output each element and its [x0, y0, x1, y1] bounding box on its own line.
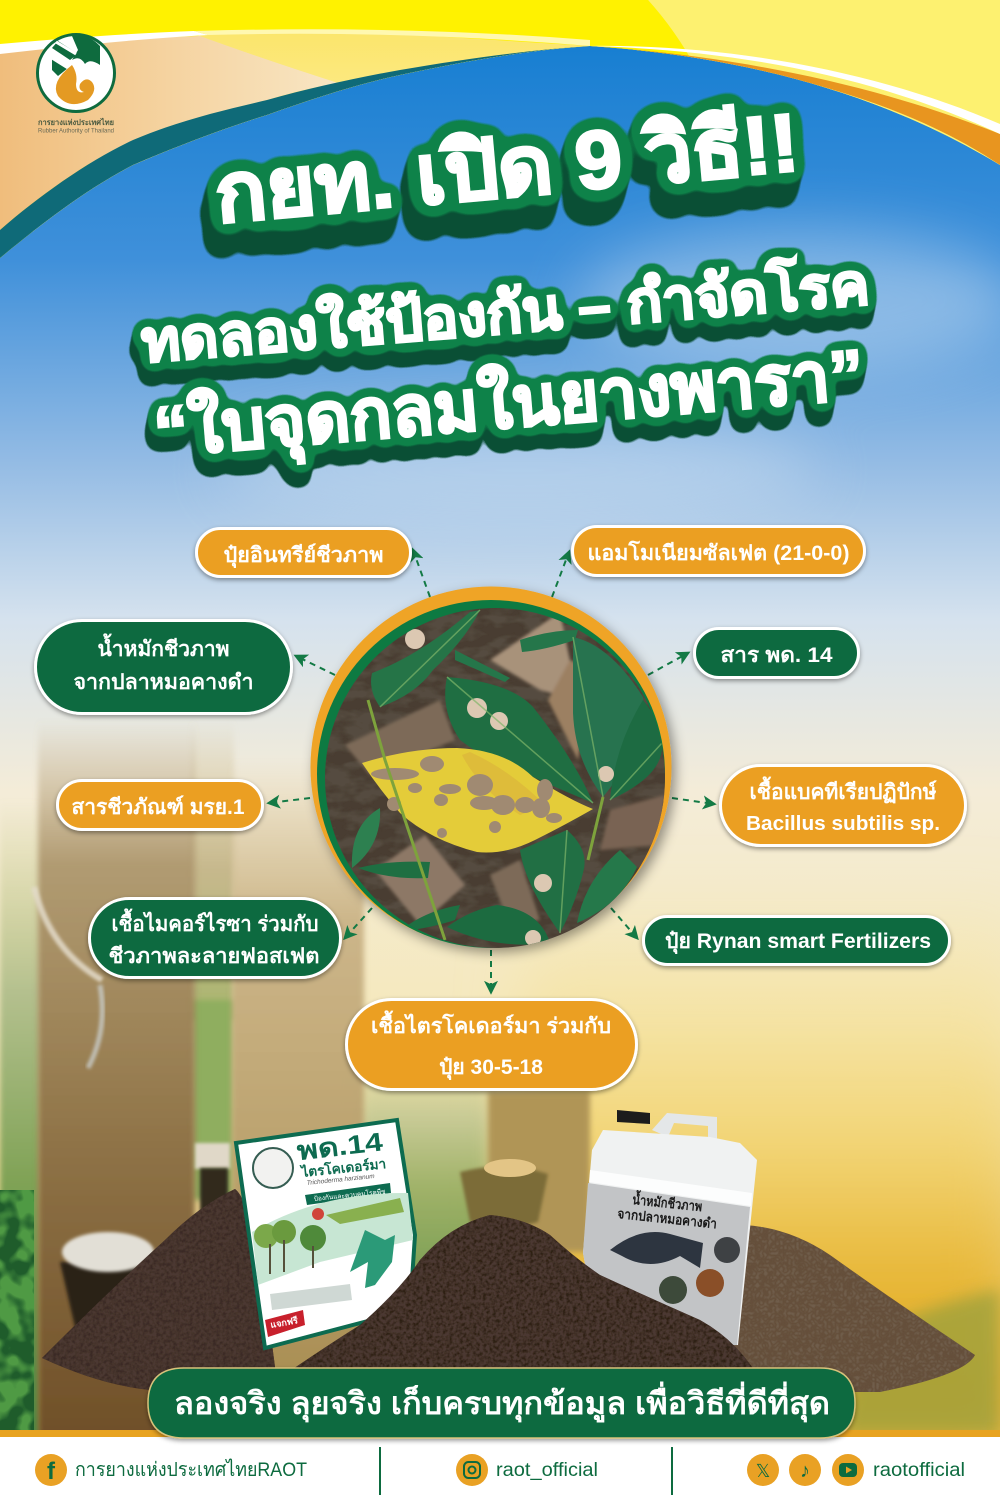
- product: LDD 14 trichoderma packet: ป้องกันและควบคุมโรคพืช: [313, 1187, 386, 1203]
- method: antagonistic bacteria: Bacillus subtilis sp.: [746, 813, 940, 835]
- method: biological product PSU 1: สารชีวภัณฑ์ มรย.1: [72, 795, 245, 819]
- logo: Rubber Authority of Thailand: การยางแห่งประเทศไทย: [38, 117, 114, 127]
- bottom slogan banner: ลองจริง ลุยจริง เก็บครบทุกข้อมูล เพื่อวิธีที่ดีที่สุด: [174, 1381, 830, 1423]
- footer: X, TikTok, YouTube: raotofficial: [873, 1459, 965, 1481]
- product: bio-extract jug: [583, 1110, 757, 1345]
- method: mycorrhiza with phosphate solubilizer: ชีวภาพละลายฟอสเฟต: [108, 944, 320, 968]
- footer: instagram: raot_official: [496, 1459, 598, 1481]
- product: LDD 14 trichoderma packet: ไตรโคเดอร์มา: [299, 1154, 387, 1180]
- method: Rynan smart fertilizers: [644, 916, 950, 964]
- method: biological product PSU 1: [58, 780, 262, 830]
- footer: [0, 1437, 1000, 1500]
- method: ammonium sulfate: [572, 526, 864, 576]
- method: ammonium sulfate: แอมโมเนียมซัลเฟต (21-0-0): [588, 540, 850, 565]
- product: LDD 14 trichoderma packet: Trichoderma harzianum: [306, 1173, 376, 1187]
- product: LDD 14 trichoderma packet: [236, 1120, 415, 1348]
- method: bio-extract from blackchin tilapia: น้ำหมักชีวภาพ: [97, 633, 230, 661]
- bottom slogan banner: [148, 1368, 855, 1438]
- method: bio-extract from blackchin tilapia: จากปลาหมอคางดำ: [74, 671, 254, 694]
- method: antagonistic bacteria: เชื้อแบคทีเรียปฏิปักษ์: [750, 776, 937, 804]
- fertilizer pile: pellets: [715, 1225, 975, 1392]
- product: LDD 14 trichoderma packet: พด.14: [295, 1126, 385, 1166]
- product: LDD 14 trichoderma packet: แจกฟรี: [270, 1315, 299, 1330]
- logo: Rubber Authority of Thailand: [38, 34, 114, 134]
- title line 3: “ใบจุดกลมในยางพารา”: [151, 333, 867, 476]
- method: trichoderma with 30-5-18 fertilizer: ปุ๋ย 30-5-18: [439, 1056, 543, 1081]
- top corner yellow banner: [0, 0, 1000, 270]
- method: LDD 14: [694, 628, 858, 678]
- footer: X, TikTok, YouTube: ♪: [800, 1460, 810, 1482]
- background rubber plantation: [0, 720, 1000, 1440]
- logo: Rubber Authority of Thailand: Rubber Authority of Thailand: [38, 128, 114, 134]
- footer: X, TikTok, YouTube: [747, 1454, 965, 1486]
- method: trichoderma with 30-5-18 fertilizer: เชื้อไตรโคเดอร์มา ร่วมกับ: [371, 1010, 611, 1038]
- method: Rynan smart fertilizers: ปุ๋ย Rynan smart Fertilizers: [665, 930, 931, 955]
- central leaf photo circle: [310, 586, 672, 950]
- footer: X, TikTok, YouTube: 𝕏: [756, 1461, 770, 1481]
- fertilizer pile: rubber-leaf compost: [42, 1189, 278, 1390]
- footer: facebook: f: [47, 1458, 56, 1485]
- method: organic bio-fertilizer: ปุ๋ยอินทรีย์ชีวภาพ: [224, 543, 384, 569]
- method: trichoderma with 30-5-18 fertilizer: [346, 1000, 636, 1090]
- background soft clouds: [220, 230, 1000, 520]
- method: bio-extract from blackchin tilapia: [36, 620, 292, 714]
- footer: instagram: [456, 1454, 598, 1486]
- dashed arrows from the circle to each method: [269, 550, 714, 992]
- title line 2: ทดลองใช้ป้องกัน – กำจัดโรค: [139, 249, 872, 375]
- fertilizer pile: soil compost: [255, 1215, 768, 1395]
- bottom orange strip: [0, 1430, 1000, 1437]
- product: bio-extract jug: น้ำหมักชีวภาพ: [632, 1189, 703, 1214]
- method: LDD 14: สาร พด. 14: [720, 644, 833, 667]
- method: organic bio-fertilizer: [196, 528, 410, 576]
- product: bio-extract jug: จากปลาหมอคางดำ: [617, 1206, 718, 1231]
- method: antagonistic bacteria: [720, 766, 966, 846]
- footer: facebook: [35, 1454, 307, 1486]
- method: mycorrhiza with phosphate solubilizer: [90, 898, 340, 978]
- title line 1: กยท. เปิด 9 วิธี!!: [212, 97, 802, 240]
- footer: facebook: การยางแห่งประเทศไทยRAOT: [75, 1458, 307, 1481]
- method: mycorrhiza with phosphate solubilizer: เชื้อไมคอร์ไรซา ร่วมกับ: [112, 908, 318, 936]
